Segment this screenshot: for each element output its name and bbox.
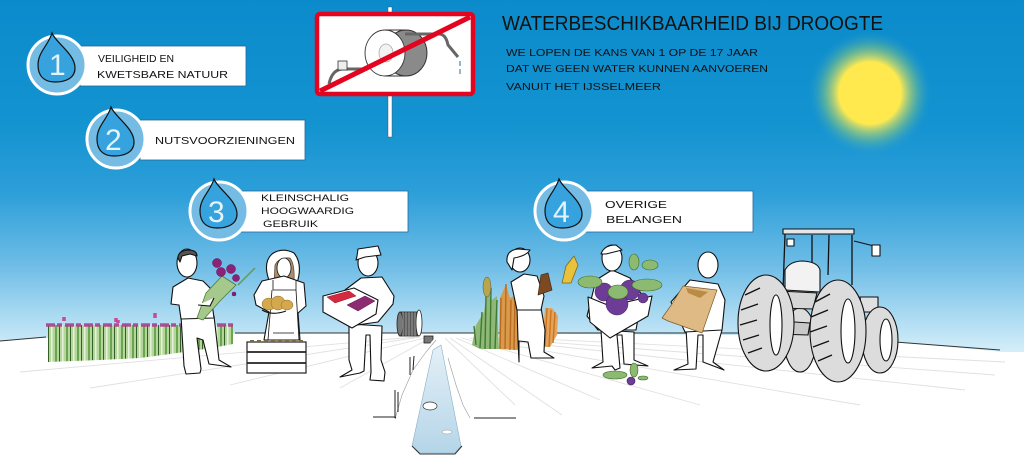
figure: man with tulips: [171, 249, 255, 374]
cab frame: [783, 234, 852, 291]
panel: category 3: HOOGWAARDIG: [261, 206, 354, 217]
panel: category 2: [87, 107, 305, 168]
figure: man with crate of fruit: [323, 246, 394, 381]
panel: sign no hose reel: [317, 7, 473, 137]
right rear wheel: [810, 280, 866, 382]
text block: intro: WE LOPEN DE KANS VAN 1 OP DE 17 JAAR: [506, 47, 758, 59]
prohibition stroke: [320, 17, 470, 91]
figure: man with paper bag: [662, 252, 725, 370]
panel: category 2: NUTSVOORZIENINGEN: [155, 135, 295, 147]
crate of fruit: [323, 288, 378, 328]
paper bag: [662, 286, 717, 333]
sign board: [317, 14, 473, 94]
panel: category 1: [28, 33, 246, 94]
panel: category 3: 3: [208, 196, 225, 229]
panel: category 1: 1: [49, 49, 66, 82]
legs: [340, 324, 385, 381]
shirt: [345, 277, 394, 326]
sky background: [0, 0, 1024, 352]
panel: category 4: [535, 179, 753, 240]
crate: [588, 296, 652, 338]
figure: woman with potatoes: [254, 250, 306, 340]
beets: [595, 280, 648, 315]
panel: category 4: BELANGEN: [606, 215, 682, 226]
sun: [808, 31, 932, 155]
seat: [785, 261, 820, 292]
text block: intro: [506, 47, 768, 93]
title: WATERBESCHIKBAARHEID BIJ DROOGTE: [502, 13, 883, 35]
panel: category 4: OVERIGE: [605, 200, 667, 211]
panel: category 4: 4: [553, 196, 570, 229]
front right wheel: [862, 307, 898, 373]
text block: intro: VANUIT HET IJSSELMEER: [506, 81, 661, 93]
far wheel: [784, 308, 816, 372]
mixed crops: [472, 277, 558, 350]
figure: man with crate of beets: [578, 245, 662, 370]
cab roof: [783, 229, 854, 234]
left rear wheel: [738, 275, 794, 371]
tractor: [738, 229, 898, 382]
icon: hose reel: [329, 30, 460, 84]
tulip field: [46, 313, 235, 362]
panel: category 3: GEBRUIK: [263, 219, 319, 230]
sign post: [388, 7, 392, 137]
leaves: [578, 254, 662, 299]
hose reel on ground: [397, 310, 433, 343]
beet on ground: [603, 363, 648, 385]
tulips: [212, 258, 240, 296]
potato crate: [247, 341, 306, 373]
text block: intro: DAT WE GEEN WATER KUNNEN AANVOEREN: [506, 63, 768, 75]
shirt: [171, 278, 214, 319]
panel: category 3: [190, 179, 408, 240]
panel: category 2: 2: [105, 124, 122, 157]
potatoes: [262, 296, 293, 310]
panel: category 3: KLEINSCHALIG: [261, 193, 349, 204]
rear body: [779, 291, 817, 309]
bouquet stems: [197, 276, 236, 320]
figure: woman with corn: [507, 248, 578, 362]
ditch with water: [373, 335, 516, 455]
panel: category 1: VEILIGHEID EN: [98, 53, 174, 65]
ground: [0, 333, 1024, 471]
trousers and shoes: [181, 316, 231, 374]
panel: category 1: KWETSBARE NATUUR: [97, 69, 228, 81]
